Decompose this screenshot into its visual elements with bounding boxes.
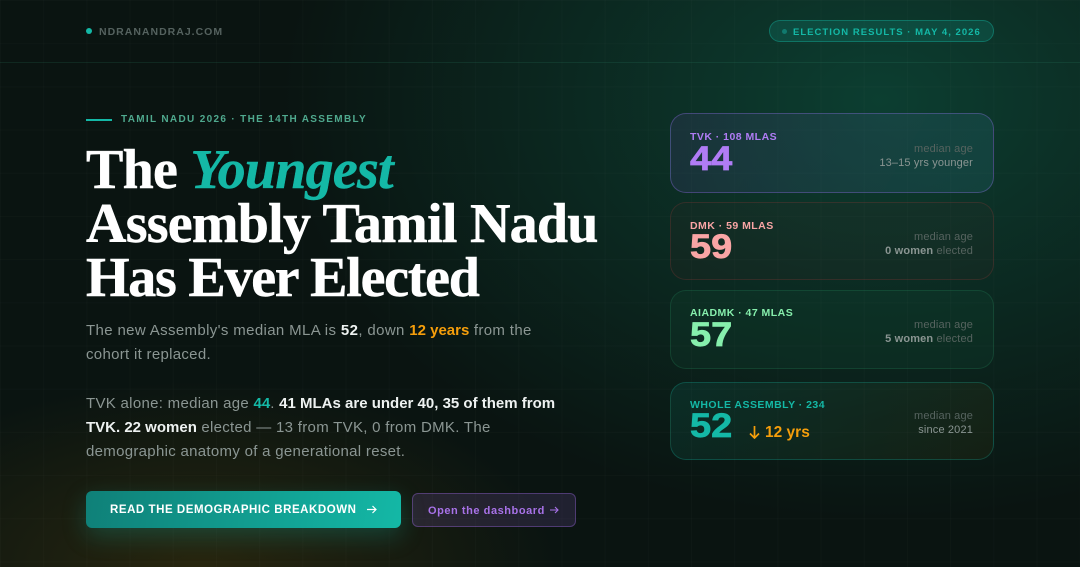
title (86, 139, 598, 309)
detail paragraph: demographic anatomy of a generational reset. (86, 443, 405, 460)
panel: DMK: median age (914, 231, 973, 243)
icon: down arrow (750, 426, 760, 439)
panel: DMK: 0 women elected (885, 245, 973, 257)
primary button (86, 491, 401, 528)
panel: TVK: 13–15 yrs younger (879, 157, 973, 169)
intro paragraph: The new Assembly's median MLA is 52, down 12 years from the (86, 322, 532, 339)
panel: whole assembly: median age (914, 410, 973, 422)
detail paragraph: TVK. 22 women elected — 13 from TVK, 0 from DMK. The (86, 419, 491, 436)
panel: AIADMK: 57 (690, 316, 732, 354)
title: The Youngest (86, 139, 393, 201)
detail paragraph (86, 395, 555, 460)
intro paragraph (86, 322, 532, 363)
site brand: NDRANANDRAJ.COM (99, 26, 223, 38)
title: Assembly Tamil Nadu (86, 193, 598, 255)
secondary button: Open the dashboard (428, 505, 545, 517)
primary button: READ THE DEMOGRAPHIC BREAKDOWN (110, 504, 356, 516)
badge: election results date: ELECTION RESULTS · MAY 4, 2026 (793, 27, 981, 38)
eyebrow: TAMIL NADU 2026 · THE 14TH ASSEMBLY (121, 114, 367, 125)
badge: election results date (769, 20, 994, 42)
panel: TVK (670, 113, 994, 193)
detail paragraph: TVK alone: median age 44. 41 MLAs are under 40, 35 of them from (86, 395, 555, 412)
panel: whole assembly: WHOLE ASSEMBLY · 234 (690, 399, 825, 411)
panel: DMK: DMK · 59 MLAS (690, 220, 774, 232)
panel: AIADMK: median age (914, 319, 973, 331)
panel: whole assembly: since 2021 (918, 424, 973, 436)
panel: AIADMK: AIADMK · 47 MLAS (690, 307, 793, 319)
intro paragraph: cohort it replaced. (86, 346, 211, 363)
panel: TVK: 44 (690, 140, 732, 178)
panel: DMK (670, 202, 994, 280)
panel: DMK: 59 (690, 228, 732, 266)
icon: arrow (550, 506, 559, 514)
panel: whole assembly: 52 (690, 407, 732, 445)
title: Has Ever Elected (86, 247, 479, 309)
panel: whole assembly (670, 382, 994, 460)
panel: AIADMK (670, 290, 994, 369)
panel: TVK: TVK · 108 MLAS (690, 131, 777, 143)
panel: whole assembly: 12 yrs (765, 424, 810, 441)
secondary button (412, 493, 576, 527)
icon: arrow (367, 506, 377, 514)
panel: TVK: median age (914, 143, 973, 155)
panel: AIADMK: 5 women elected (885, 333, 973, 345)
